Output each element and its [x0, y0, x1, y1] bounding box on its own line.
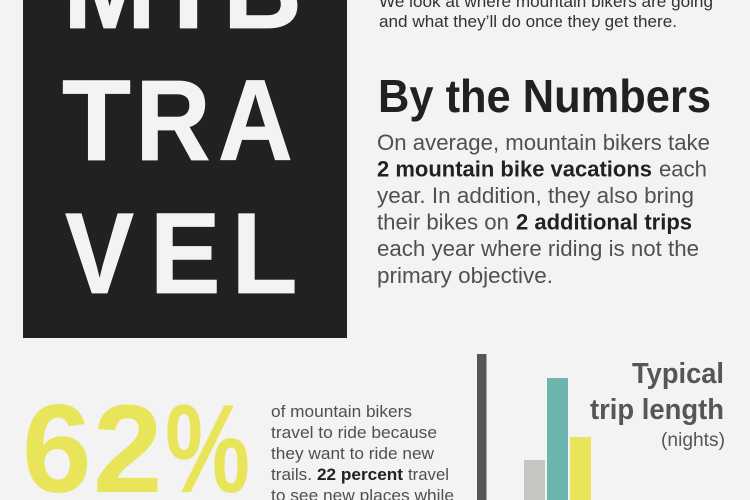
title: MTB TRAVEL: R: [136, 57, 210, 185]
title: MTB TRAVEL: V: [65, 190, 134, 318]
text block: reasons for travel: trails.: [271, 466, 312, 484]
text block: reasons for travel: 22 percent: [317, 466, 404, 484]
text block: reasons for travel: of mountain bikers: [271, 403, 412, 421]
chart heading: typical trip length: [590, 358, 725, 451]
title: MTB TRAVEL: E: [150, 190, 220, 318]
intro text: [379, 0, 713, 31]
intro text: and what they’ll do once they get there.: [379, 13, 677, 31]
text block: reasons for travel: travel: [408, 466, 449, 484]
title: MTB TRAVEL: A: [218, 57, 293, 185]
text block: reasons for travel: travel to ride because: [271, 424, 437, 442]
text block: vacations per year: 2 mountain bike vacations: [377, 156, 652, 182]
chart heading: typical trip length: Typical: [632, 358, 724, 390]
title: MTB TRAVEL: L: [232, 190, 298, 318]
text block: vacations per year: primary objective.: [377, 263, 553, 288]
chart heading: typical trip length: trip length: [590, 394, 724, 426]
panel: MTB travel title block: [23, 0, 347, 338]
text block: reasons for travel: they want to ride new: [271, 445, 434, 463]
title: MTB TRAVEL: [62, 0, 302, 318]
text block: vacations per year: [377, 130, 710, 288]
divider bar: [477, 354, 486, 500]
text block: vacations per year: each year where riding is not the: [377, 236, 699, 261]
text block: vacations per year: their bikes on: [377, 210, 509, 234]
text block: vacations per year: On average, mountain bikers take: [377, 130, 710, 155]
chart heading: typical trip length: (nights): [661, 430, 725, 451]
big stat: 62%: [22, 380, 250, 500]
text block: vacations per year: 2 additional trips: [516, 210, 692, 234]
text block: reasons for travel: [271, 403, 454, 500]
heading: By the Numbers: By the Numbers: [378, 70, 711, 122]
bar chart: typical trip length: [524, 378, 591, 500]
text block: vacations per year: each: [659, 156, 707, 182]
text block: vacations per year: year. In addition, they also bring: [377, 183, 694, 208]
title: MTB TRAVEL: T: [62, 57, 131, 185]
